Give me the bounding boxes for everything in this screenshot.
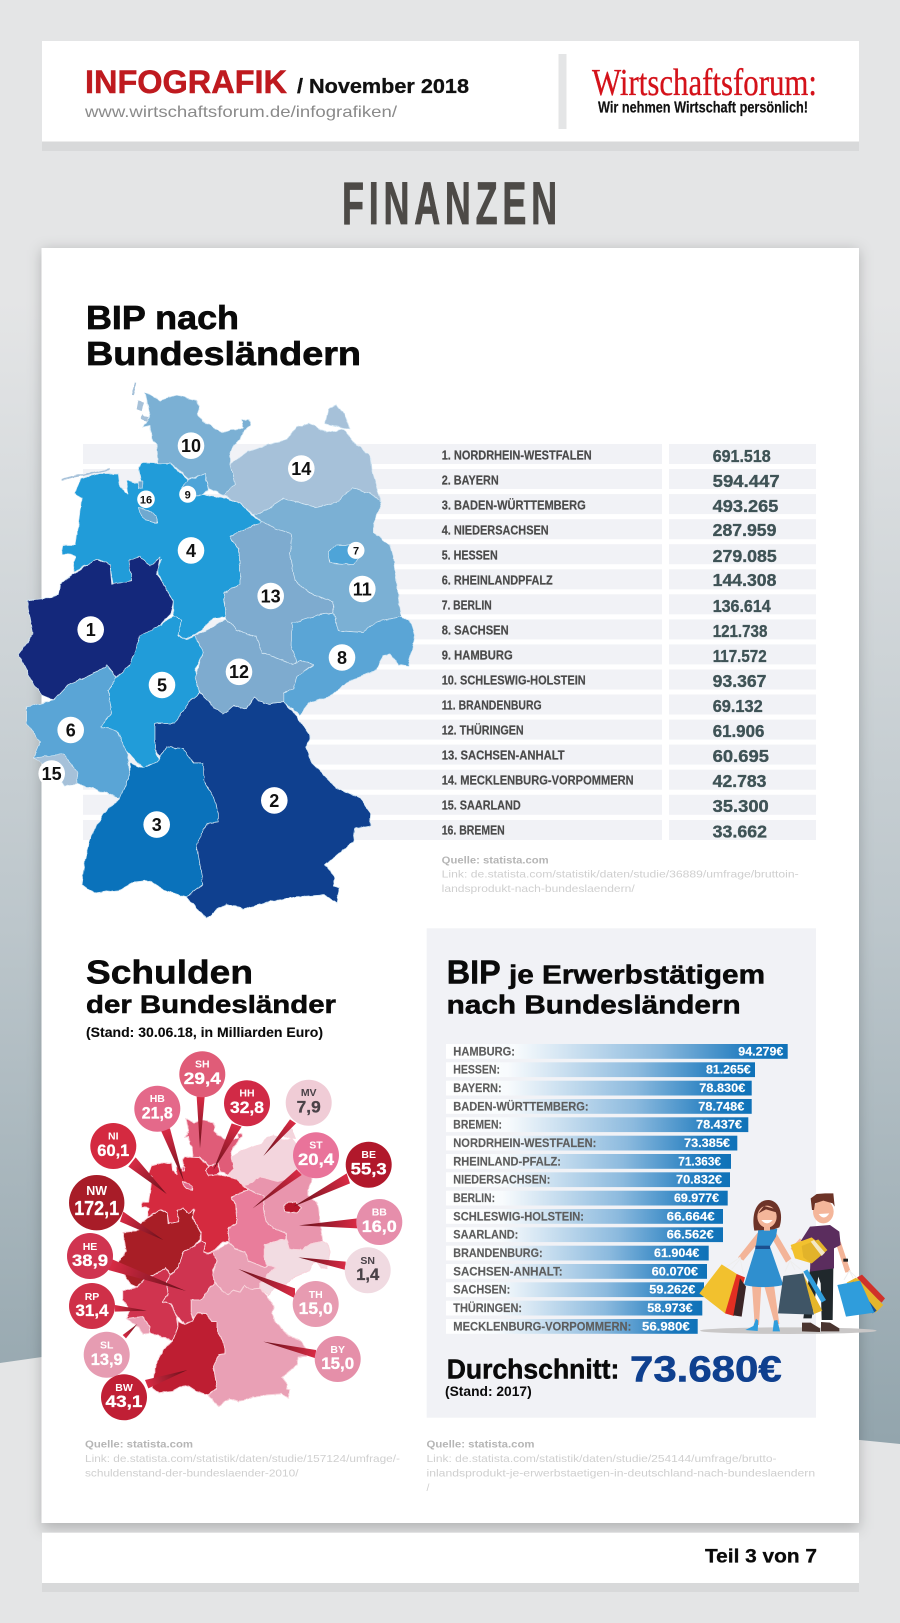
row 3: 3. BADEN-WÜRTTEMBERG — [442, 497, 586, 512]
bar Baden-Württemberg — [446, 1099, 752, 1114]
right bag — [853, 1275, 885, 1303]
bubble HB: 21,8 — [142, 1104, 173, 1122]
number markers: 3 — [152, 815, 162, 835]
bubble TH — [238, 1269, 339, 1327]
bubble BY: BY — [330, 1344, 345, 1356]
row 1: 1. NORDRHEIN-WESTFALEN — [442, 448, 592, 462]
heading: Schulden der Bundesländer: (Stand: 30.06.18, in Milliarden Euro) — [86, 1024, 323, 1040]
heading: BIP nach Bundesländern — [86, 299, 361, 372]
bubble BW: BW — [115, 1382, 133, 1394]
number markers: 8 — [337, 648, 347, 668]
row 3 — [83, 494, 816, 516]
number markers — [38, 432, 376, 838]
bar Thüringen: THÜRINGEN: — [453, 1302, 522, 1315]
number markers: 12 — [229, 662, 249, 682]
number markers: 13 — [261, 586, 281, 606]
bubble BW — [101, 1370, 187, 1420]
main panel shadow — [42, 250, 859, 1529]
row 10: 93.367 — [713, 671, 766, 691]
bar Schleswig-Holstein: SCHLESWIG-HOLSTEIN: — [453, 1211, 584, 1223]
row 11: 69.132 — [713, 696, 763, 716]
centre bag — [803, 1269, 826, 1303]
row 3: 493.265 — [713, 496, 779, 516]
yellow bag — [699, 1264, 740, 1313]
map shapes — [18, 382, 415, 918]
row 2: 2. BAYERN — [442, 473, 499, 487]
bar Brandenburg: BRANDENBURG: — [453, 1248, 543, 1260]
bar Baden-Württemberg: BADEN-WÜRTTEMBERG: — [453, 1100, 589, 1113]
panel: BIP je Erwerbstätigem — [427, 928, 816, 1418]
bubble TH: TH — [309, 1289, 323, 1301]
row 7: 136.614 — [713, 596, 771, 616]
bar Hessen — [446, 1062, 755, 1077]
bubble NI — [90, 1123, 167, 1194]
bar Bremen: 78.437€ — [696, 1118, 742, 1132]
man's trousers — [803, 1268, 833, 1320]
source: BIP je Erwerbstätigem — [426, 1439, 815, 1494]
heading: Schulden der Bundesländer: Schulden — [86, 953, 253, 990]
source: BIP je Erwerbstätigem: / — [426, 1482, 430, 1494]
average value: 73.680€ — [630, 1349, 782, 1390]
source: BIP table: landsprodukt-nach-bundeslaendern/ — [442, 883, 635, 895]
bar Thüringen: 58.973€ — [647, 1301, 693, 1315]
logo slogan: Wir nehmen Wirtschaft persönlich! — [598, 100, 808, 116]
row 14 — [83, 770, 816, 791]
heading: BIP nach Bundesländern: BIP nach — [86, 299, 239, 336]
bubble MV: MV — [301, 1087, 317, 1099]
row 6: 6. RHEINLANDPFALZ — [442, 573, 553, 587]
row 13: 60.695 — [713, 746, 769, 766]
row 14: 14. MECKLENBURG-VORPOMMERN — [442, 774, 634, 788]
bubble HB — [134, 1086, 184, 1182]
man's arms — [791, 1238, 851, 1273]
bar Rheinland-Pfalz — [446, 1154, 731, 1169]
row 2 — [83, 469, 816, 491]
bar Schleswig-Holstein: 66.664€ — [667, 1209, 715, 1223]
bar Thüringen — [446, 1301, 702, 1316]
row 10: 10. SCHLESWIG-HOLSTEIN — [442, 674, 586, 688]
bubble HH — [213, 1080, 270, 1170]
bar Niedersachsen: NIEDERSACHSEN: — [453, 1175, 550, 1187]
source: BIP table: Link: de.statista.com/statistik/daten/studie/36889/umfrage/bruttoin- — [442, 869, 799, 881]
number markers: 15 — [42, 764, 62, 784]
source: BIP table — [442, 855, 799, 895]
heading: Schulden der Bundesländer: der Bundesländer — [86, 991, 336, 1019]
number markers: 16 — [140, 494, 152, 506]
bubble SL — [84, 1324, 137, 1378]
average date note: (Stand: 2017) — [445, 1383, 532, 1399]
bar chart: BIP per employee — [446, 1044, 788, 1334]
bar Brandenburg — [446, 1246, 709, 1260]
source: Schulden: Link: de.statista.com/statistik/daten/studie/157124/umfrage/- — [85, 1453, 401, 1465]
table: BIP by state — [83, 444, 816, 842]
bar Bayern — [446, 1081, 752, 1096]
bar Sachsen — [446, 1282, 704, 1297]
bubble SH: 29,4 — [184, 1069, 221, 1088]
map: BIP Germany — [18, 382, 415, 918]
row 1 — [83, 444, 816, 466]
bubble BE — [293, 1142, 392, 1207]
heading: BIP je Erwerbstätigem — [447, 953, 765, 1019]
bubble RP — [69, 1283, 147, 1329]
row 16: 16. BREMEN — [442, 824, 505, 838]
man's shirt — [801, 1225, 841, 1272]
bubble RP: 31,4 — [76, 1301, 109, 1320]
bubble SH — [179, 1051, 225, 1148]
row 11 — [83, 694, 816, 716]
bar Bayern: 78.830€ — [699, 1081, 746, 1095]
row 9: 9. HAMBURG — [442, 648, 513, 662]
row 2: 594.447 — [713, 471, 780, 491]
bar Hamburg: 94.279€ — [738, 1044, 784, 1058]
source: BIP je Erwerbstätigem: Link: de.statista.com/statistik/daten/studie/254144/umfrage/brutto- — [426, 1453, 777, 1465]
bubble SH: SH — [195, 1059, 210, 1071]
bubble HE: 38,9 — [72, 1251, 108, 1270]
row 13: 13. SACHSEN-ANHALT — [442, 748, 565, 762]
number markers: 11 — [353, 579, 372, 599]
bar Hessen: 81.265€ — [706, 1063, 751, 1077]
background mountain gradient — [0, 300, 900, 1444]
row 12: 61.906 — [713, 721, 765, 741]
number markers: 4 — [186, 541, 196, 561]
source: BIP je Erwerbstätigem: Quelle: statista.com — [426, 1439, 534, 1451]
row 6 — [83, 569, 816, 590]
bar Mecklenburg-Vorpommern — [446, 1319, 698, 1334]
number markers: 2 — [269, 791, 279, 811]
gift box — [791, 1237, 827, 1263]
header url: www.wirtschaftsforum.de/infografiken/ — [84, 104, 398, 121]
row 8: 121.738 — [713, 621, 768, 641]
bar Rheinland-Pfalz: 71.363€ — [678, 1154, 721, 1168]
bubble HE — [67, 1233, 186, 1291]
bubble BE: 55,3 — [351, 1160, 387, 1178]
footer part label: Teil 3 von 7 — [705, 1547, 817, 1568]
bar Schleswig-Holstein — [446, 1209, 723, 1224]
bar Mecklenburg-Vorpommern: MECKLENBURG-VORPOMMERN: — [453, 1321, 631, 1333]
bubble ST: ST — [309, 1140, 323, 1152]
bubble NW — [69, 1175, 163, 1240]
bar Sachsen-Anhalt: 60.070€ — [652, 1264, 698, 1278]
illustration: shopping couple — [699, 1193, 885, 1334]
woman's shoes — [745, 1319, 780, 1331]
header title: INFOGRAFIK — [85, 64, 287, 100]
bubble HH: HH — [239, 1088, 255, 1100]
bubble SL: 13,9 — [91, 1350, 123, 1369]
bubble HE: HE — [83, 1241, 97, 1253]
woman's dress — [744, 1229, 783, 1287]
bar Saarland: SAARLAND: — [453, 1230, 518, 1242]
average label — [445, 1349, 782, 1399]
row 12: 12. THÜRINGEN — [442, 722, 524, 738]
bar Hamburg — [446, 1044, 788, 1059]
bubble BY — [263, 1336, 361, 1382]
row 8 — [83, 619, 816, 641]
bar Niedersachsen — [446, 1172, 730, 1187]
row 8: 8. SACHSEN — [442, 623, 509, 637]
bar Sachsen-Anhalt: SACHSEN-ANHALT: — [453, 1266, 563, 1278]
row 6: 144.308 — [713, 570, 777, 590]
bar Berlin: 69.977€ — [674, 1191, 719, 1205]
row 4 — [83, 519, 816, 540]
bubble MV: 7,9 — [297, 1098, 321, 1116]
bubble NI: 60,1 — [97, 1141, 129, 1160]
row 5 — [83, 544, 816, 566]
heading: BIP je Erwerbstätigem: nach Bundesländern — [447, 989, 741, 1019]
row 14: 42.783 — [713, 771, 767, 791]
bar Sachsen: SACHSEN: — [453, 1285, 510, 1297]
bubble BW: 43,1 — [106, 1392, 142, 1411]
bar Niedersachsen: 70.832€ — [676, 1173, 722, 1187]
debt bubbles — [67, 1051, 402, 1420]
row 7: 7. BERLIN — [442, 598, 492, 612]
heading: BIP je Erwerbstätigem: je Erwerbstätigem — [508, 961, 765, 989]
average label: Durchschnitt: — [447, 1353, 619, 1384]
heading: BIP je Erwerbstätigem: BIP — [447, 953, 501, 990]
logo wordmark: Wirtschaftsforum: — [592, 62, 817, 104]
bar Bayern: BAYERN: — [453, 1083, 502, 1095]
bubble SN: SN — [360, 1255, 375, 1267]
bar Sachsen: 59.262€ — [649, 1283, 696, 1297]
row 9 — [83, 644, 816, 666]
footer bar — [42, 1533, 859, 1592]
bubble SN: 1,4 — [356, 1265, 380, 1284]
bubble HB: HB — [150, 1093, 165, 1105]
bar Bremen: BREMEN: — [453, 1120, 502, 1132]
row 10 — [83, 670, 816, 691]
bubble BB: BB — [372, 1206, 387, 1218]
bubble BY: 15,0 — [321, 1354, 354, 1373]
bar Saarland — [446, 1227, 723, 1242]
row 5: 5. HESSEN — [442, 548, 498, 562]
bar Mecklenburg-Vorpommern: 56.980€ — [642, 1319, 690, 1333]
source: Schulden — [85, 1439, 401, 1480]
bubble NI: NI — [108, 1130, 119, 1142]
bubble ST: 20,4 — [298, 1150, 335, 1169]
bubble RP: RP — [85, 1291, 99, 1303]
main white panel — [42, 248, 859, 1523]
row 4: 287.959 — [713, 520, 777, 540]
row 16: 33.662 — [713, 822, 767, 842]
bubble TH: 15,0 — [299, 1299, 333, 1318]
row 15 — [83, 795, 816, 816]
bar Rheinland-Pfalz: RHEINLAND-PFALZ: — [453, 1156, 561, 1168]
row 12 — [83, 720, 816, 741]
bar Hamburg: HAMBURG: — [453, 1046, 515, 1058]
map: Schulden Germany — [118, 1118, 330, 1407]
bubble ST — [253, 1132, 339, 1208]
bubble BE: BE — [361, 1149, 376, 1161]
bubble NW: 172,1 — [74, 1198, 119, 1220]
page title: FINANZEN — [342, 171, 562, 237]
bar Baden-Württemberg: 78.748€ — [698, 1099, 745, 1113]
number markers: 9 — [185, 489, 191, 501]
man's head — [813, 1200, 834, 1223]
number markers: 5 — [157, 675, 167, 695]
bar Sachsen-Anhalt — [446, 1264, 707, 1279]
number markers: 1 — [86, 620, 96, 640]
header date: / November 2018 — [297, 76, 469, 98]
bar Saarland: 66.562€ — [667, 1228, 714, 1242]
row 7 — [83, 594, 816, 616]
row 9: 117.572 — [713, 646, 767, 666]
bar Nordrhein-Westfalen: 73.385€ — [684, 1136, 730, 1150]
bubble BB: 16,0 — [362, 1217, 397, 1236]
bar Nordrhein-Westfalen: NORDRHEIN-WESTFALEN: — [453, 1138, 596, 1150]
row 13 — [83, 745, 816, 766]
row 1: 691.518 — [713, 446, 771, 466]
bubble NW: NW — [86, 1184, 107, 1198]
bubble MV — [263, 1080, 332, 1156]
row 15: 15. SAARLAND — [442, 799, 521, 813]
bar Nordrhein-Westfalen — [446, 1136, 737, 1150]
number markers: 10 — [181, 436, 201, 456]
woman's head — [753, 1200, 781, 1231]
bubble SL: SL — [100, 1340, 114, 1352]
bubble BB — [299, 1199, 402, 1245]
heading: BIP nach Bundesländern: Bundesländern — [86, 335, 361, 372]
number markers: 6 — [66, 720, 76, 740]
bar Brandenburg: 61.904€ — [654, 1246, 700, 1260]
header bar — [42, 41, 859, 151]
source: Schulden: Quelle: statista.com — [85, 1439, 193, 1451]
bubble SN — [298, 1247, 391, 1293]
row 15: 35.300 — [713, 796, 769, 816]
source: BIP je Erwerbstätigem: inlandsprodukt-je-erwerbstaetigen-in-deutschland-nach-bundeslaendern — [426, 1468, 815, 1480]
bar Berlin — [446, 1191, 728, 1206]
source: BIP table: Quelle: statista.com — [442, 855, 549, 867]
heading: Schulden der Bundesländer — [86, 953, 336, 1040]
bar Berlin: BERLIN: — [453, 1193, 495, 1205]
row 4: 4. NIEDERSACHSEN — [442, 523, 549, 537]
bar Hessen: HESSEN: — [453, 1065, 500, 1077]
source: Schulden: schuldenstand-der-bundeslaender-2010/ — [85, 1468, 299, 1480]
man's shoes — [802, 1322, 839, 1332]
number markers: 14 — [291, 459, 311, 479]
row 5: 279.085 — [713, 546, 777, 566]
bar Bremen — [446, 1117, 748, 1132]
row 11: 11. BRANDENBURG — [442, 698, 542, 712]
woman's legs and arms — [738, 1233, 791, 1325]
bubble HH: 32,8 — [230, 1098, 264, 1117]
number markers: 7 — [353, 545, 359, 557]
row 16 — [83, 820, 816, 842]
